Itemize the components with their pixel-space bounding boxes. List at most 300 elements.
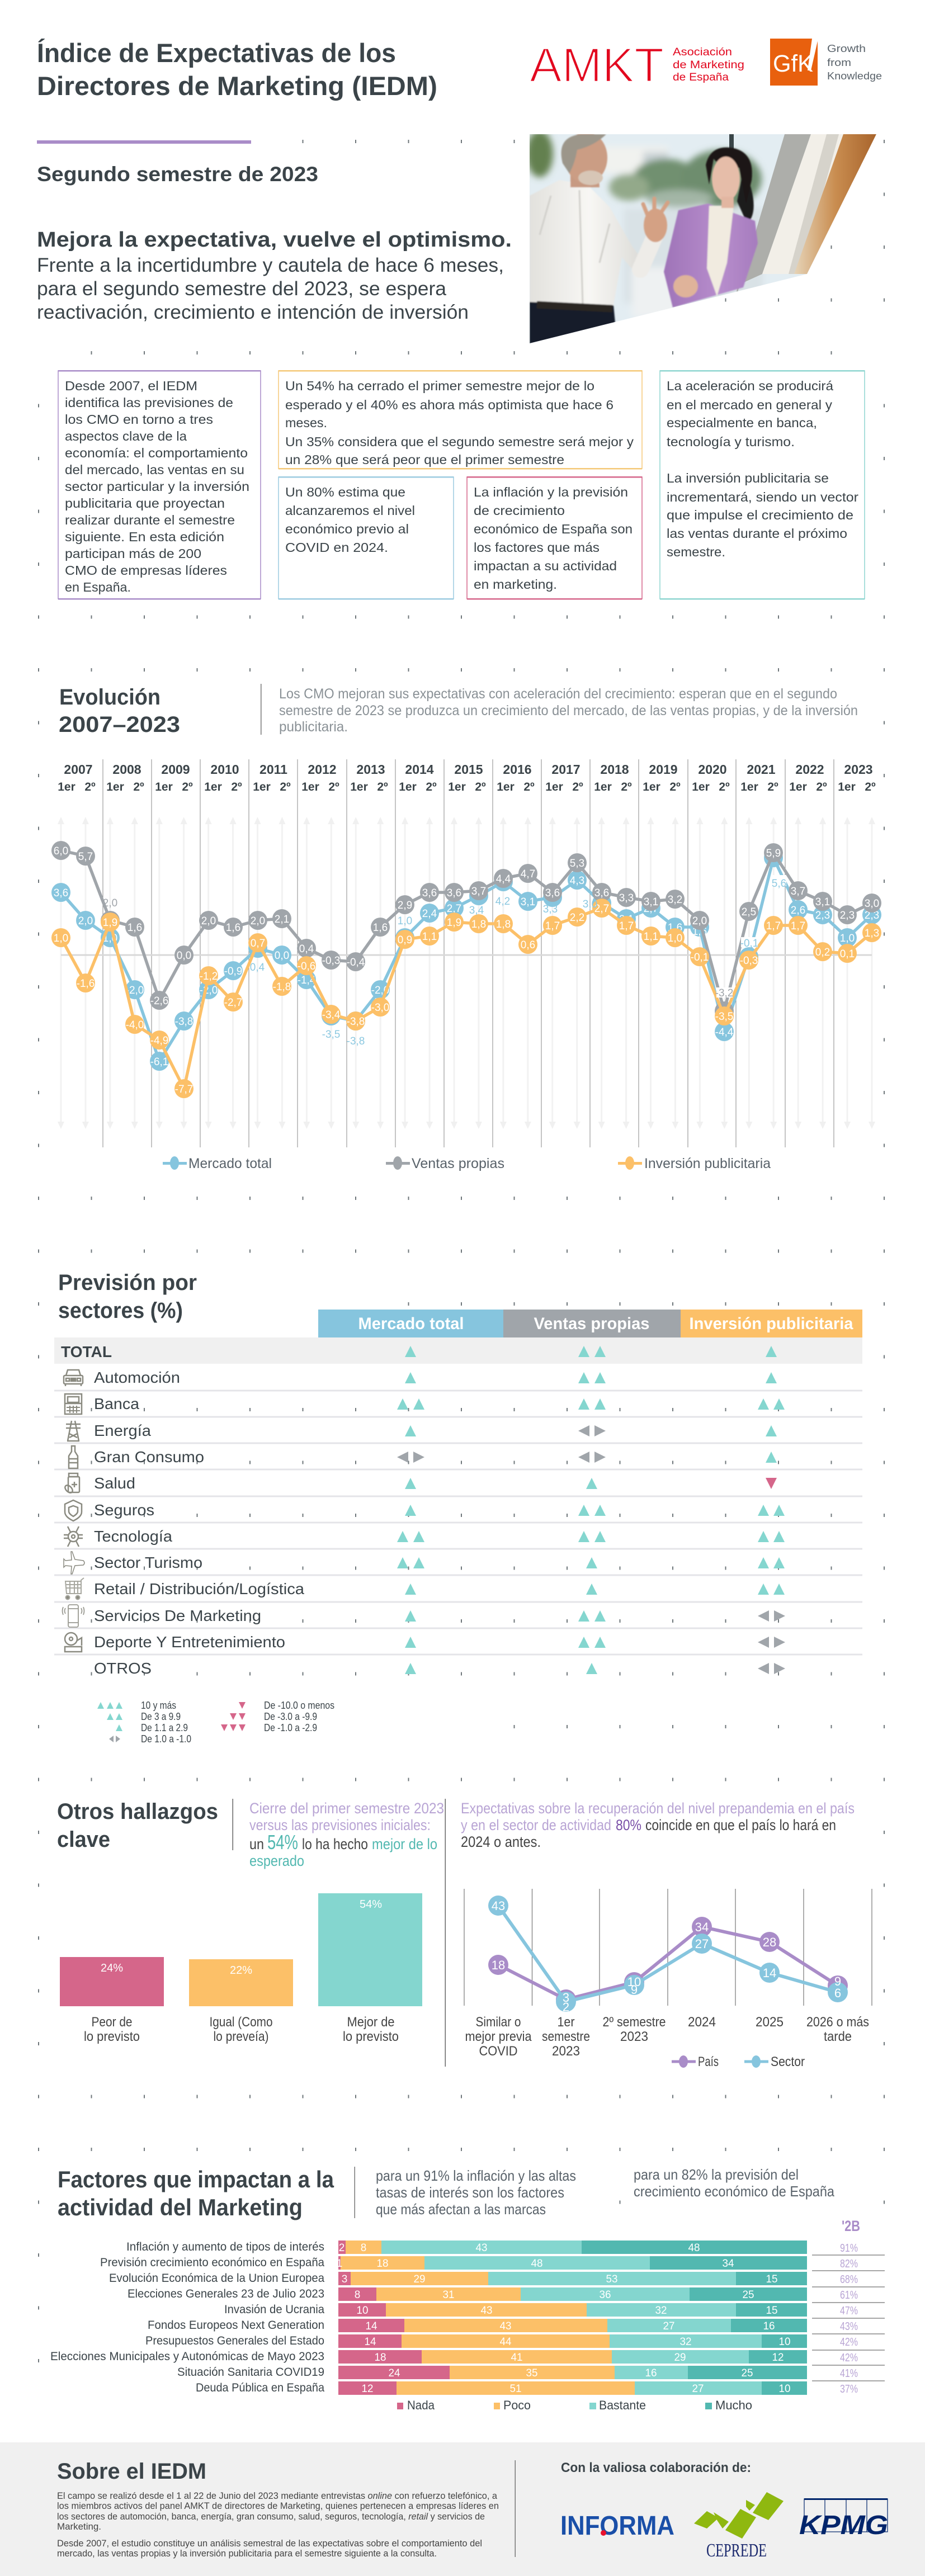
series: Ventas propias: -0,4 <box>347 957 365 968</box>
year and semester header: 2008 <box>112 762 141 777</box>
series: Ventas propias: 4,4 <box>496 873 511 885</box>
logo: AMKT: de Marketing <box>673 59 744 71</box>
panel: first semester results: Un 35% considera que el segundo semestre será mejor y <box>285 434 634 449</box>
bar segments: 31 <box>443 2289 454 2301</box>
year and semester header: 1er <box>740 781 758 793</box>
series: Inversión publicitaria <box>51 899 881 1098</box>
logo: AMKT <box>530 39 744 92</box>
series: País <box>488 1917 848 2010</box>
panel: about IEDM: participan más de 200 <box>65 546 201 561</box>
year and semester header: 2015 <box>454 762 483 777</box>
panel: first semester results: Un 54% ha cerrado el primer semestre mejor de lo <box>285 379 594 393</box>
bar chart: first semester result: lo previsto <box>343 2029 399 2044</box>
category labels: mejor previa <box>465 2029 532 2044</box>
line chart: recovery expectation <box>464 1889 872 2059</box>
title: Índice de Expectativas de los <box>37 38 396 68</box>
legend: forecast symbols: De -3.0 a -9.9 <box>264 1711 317 1722</box>
series: Ventas propias: 0,4 <box>299 943 314 955</box>
bar segments: 12 <box>361 2383 374 2395</box>
row labels: OTROS <box>94 1660 152 1677</box>
year and semester header: 1er <box>301 781 319 793</box>
panel: inflation factors: los factores que más <box>474 540 600 555</box>
table header: Ventas propias <box>534 1315 650 1333</box>
text: first semester close: un <box>249 1836 264 1852</box>
text: evolution intro: publicitaria. <box>279 719 348 735</box>
text: 82% growth: crecimiento económico de España <box>634 2183 834 2200</box>
year and semester header: 1er <box>155 781 173 793</box>
series: Inversión publicitaria: 1,3 <box>865 928 879 939</box>
series: Ventas propias: 3,1 <box>815 896 830 908</box>
series: Mercado total: -1,4 <box>298 975 316 986</box>
series: Ventas propias: 0,0 <box>177 950 191 962</box>
top 2 box percentages: 42% <box>840 2352 858 2364</box>
methodology text: Desde 2007, el estudio constituye un análisis semestral de las expectativas sobre el comportamiento del <box>57 2538 482 2549</box>
logo: GfK: Knowledge <box>827 70 882 82</box>
bar segments: 29 <box>414 2274 425 2285</box>
series: Sector: 27 <box>695 1937 709 1951</box>
icon: electricity tower <box>66 1421 81 1441</box>
top 2 box percentages: 43% <box>840 2320 858 2333</box>
bar segments: 35 <box>526 2367 538 2379</box>
series: Inversión publicitaria: 1,8 <box>471 919 486 930</box>
series: Inversión publicitaria: -7,7 <box>175 1084 193 1095</box>
heading: Sobre el IEDM: Sobre el IEDM <box>57 2459 206 2484</box>
year and semester header: 2º <box>621 781 632 793</box>
row labels: Retail / Distribución/Logística <box>94 1580 304 1597</box>
text: pre-pandemic recovery: Expectativas sobre la recuperación del nivel prepandemia en el país <box>461 1800 855 1817</box>
panel: about IEDM: del mercado, las ventas en su <box>65 462 244 477</box>
year and semester header: 2020 <box>698 762 727 777</box>
panel: acceleration: especialmente en banca, <box>667 415 817 430</box>
text: pre-pandemic recovery <box>461 1800 855 1850</box>
series: Inversión publicitaria: 0,9 <box>398 934 412 946</box>
category labels: COVID <box>479 2044 518 2059</box>
series: País: 34 <box>695 1920 709 1934</box>
bar segments: 16 <box>763 2320 775 2332</box>
bar segments: 10 <box>357 2305 368 2317</box>
logo: INFORMA: INFORMA <box>560 2511 674 2541</box>
series: Mercado total: 2,7 <box>447 903 461 915</box>
series: Ventas propias: 6,0 <box>54 845 68 857</box>
year and semester header: 2º <box>475 781 486 793</box>
logo: AMKT: Asociación <box>673 46 732 58</box>
year and semester header: 1er <box>789 781 807 793</box>
top 2 box percentages: 42% <box>840 2336 858 2348</box>
series: Inversión publicitaria: 1,7 <box>545 920 560 932</box>
bar segments: 10 <box>778 2336 791 2348</box>
panel: pre-COVID level <box>279 476 454 599</box>
icon: plane <box>64 1552 84 1574</box>
bar chart: first semester result: 24% <box>101 1962 123 1974</box>
series: Ventas propias <box>51 841 881 1020</box>
category labels: 2023 <box>552 2044 580 2059</box>
series: Mercado total: 4,3 <box>570 875 584 887</box>
series: Inversión publicitaria: -0,6 <box>298 961 315 972</box>
series: Inversión publicitaria: 0,7 <box>251 938 265 949</box>
series: Ventas propias: 3,6 <box>422 887 437 899</box>
text: 91% inflation: para un 91% la inflación y las altas <box>376 2167 576 2184</box>
legend: forecast symbols: De 3 a 9.9 <box>141 1711 181 1722</box>
legend: evolution chart <box>163 1156 771 1171</box>
series: Inversión publicitaria: 1,7 <box>791 920 805 932</box>
bar segments: 14 <box>365 2336 376 2348</box>
panel: pre-COVID level: Un 80% estima que <box>285 485 405 499</box>
bar segments: 43 <box>475 2242 488 2254</box>
series: Inversión publicitaria: -3,8 <box>347 1016 365 1028</box>
year and semester header: 2º <box>231 781 242 793</box>
year and semester header: 2º <box>523 781 535 793</box>
bar chart: first semester result: lo previsto <box>84 2029 140 2044</box>
panel: about IEDM: identifica las previsiones de <box>65 395 233 410</box>
series: Inversión publicitaria: -4,9 <box>150 1035 168 1047</box>
series: Ventas propias: 3,3 <box>619 892 634 904</box>
category labels <box>465 2015 869 2059</box>
series: Inversión publicitaria: -1,8 <box>273 981 291 993</box>
panel: footer about IEDM <box>0 2442 925 2576</box>
series: Ventas propias: 2,3 <box>840 910 855 921</box>
forecast markers <box>397 1346 785 1674</box>
year and semester header: 2º <box>328 781 339 793</box>
logo: KPMG <box>799 2498 888 2540</box>
outside data labels: 4,2 <box>495 896 510 907</box>
panel: acceleration: La inversión publicitaria se <box>667 471 829 485</box>
year and semester header: 2º <box>84 781 96 793</box>
series: Mercado total <box>51 848 881 1071</box>
category labels: Similar o <box>475 2015 521 2030</box>
series: Mercado total: 2,0 <box>78 915 93 927</box>
text: evolution intro: Los CMO mejoran sus expectativas con aceleración del crecimiento: esperan que en el segundo <box>279 686 837 702</box>
bar segments: 43 <box>481 2305 492 2317</box>
row labels: Sector Turismo <box>94 1554 202 1571</box>
series: Ventas propias: 3,6 <box>594 887 609 899</box>
series: Mercado total: -2,0 <box>126 985 144 996</box>
methodology text: mercado, las ventas propias y la inversión publicitaria para el semestre siguiente a la consulta. <box>57 2548 437 2559</box>
panel: about IEDM: en España. <box>65 580 131 594</box>
series: Ventas propias: 3,2 <box>668 894 682 906</box>
series: Mercado total: -2,0 <box>200 985 218 996</box>
column header: top 2 box: '2B <box>842 2218 860 2234</box>
bar segments: 32 <box>655 2305 667 2317</box>
legend: evolution chart: Ventas propias <box>412 1156 504 1171</box>
heading: Previsión por sectores: sectores (%) <box>58 1298 183 1323</box>
panel: inflation factors: económico de España son <box>474 522 633 536</box>
row labels: Energía <box>94 1422 151 1439</box>
series: Inversión publicitaria: 1,9 <box>447 917 461 929</box>
bar chart: first semester result: 54% <box>360 1898 382 1911</box>
panel: about IEDM: publicitaria que proyectan <box>65 496 225 511</box>
series: Mercado total: 2,1 <box>619 914 634 925</box>
row labels: Fondos Europeos Next Generation <box>148 2319 324 2332</box>
category labels: semestre <box>542 2029 590 2044</box>
text: 91% inflation <box>376 2167 576 2218</box>
bar chart: first semester result: 22% <box>230 1964 252 1977</box>
top 2 box percentages: 61% <box>840 2289 858 2301</box>
text: 82% growth: para un 82% la previsión del <box>634 2166 799 2183</box>
year and semester header: 2016 <box>503 762 532 777</box>
bar segments: 53 <box>606 2274 617 2285</box>
text: 91% inflation: tasas de interés son los factores <box>376 2184 564 2201</box>
series: Mercado total: -4,4 <box>715 1027 734 1038</box>
series: Ventas propias: 4,7 <box>521 868 535 880</box>
bar segments: 27 <box>663 2320 674 2332</box>
year and semester header: 1er <box>399 781 417 793</box>
line chart: evolution 2007-2023 <box>51 759 881 1147</box>
top 2 box percentages: 41% <box>840 2367 858 2380</box>
heading: Evolución: 2007–2023 <box>59 712 180 737</box>
series: Inversión publicitaria: 1,7 <box>766 920 781 932</box>
series: Ventas propias: 2,0 <box>251 915 265 927</box>
year and semester header: 2º <box>182 781 193 793</box>
bar chart: first semester result: Peor de <box>92 2015 132 2030</box>
outside data labels: -3,2 <box>715 987 733 999</box>
series: Ventas propias: 2,9 <box>398 900 412 911</box>
year and semester header: 2º <box>280 781 291 793</box>
year and semester header: 1er <box>497 781 515 793</box>
table header: Mercado total <box>358 1315 464 1333</box>
year and semester header: 1er <box>204 781 222 793</box>
series: Sector <box>488 1896 848 2014</box>
top 2 box percentages: 91% <box>840 2242 858 2254</box>
series: Mercado total: 1,6 <box>668 922 682 934</box>
panel: pre-COVID level: COVID en 2024. <box>285 540 388 555</box>
series: Inversión publicitaria: -3,4 <box>322 1009 341 1021</box>
series: Inversión publicitaria: -3,5 <box>715 1011 733 1023</box>
panel: inflation factors: en marketing. <box>474 577 557 592</box>
row labels: Salud <box>94 1474 135 1492</box>
bar segments: 8 <box>361 2242 366 2254</box>
year and semester header: 2007 <box>64 762 93 777</box>
logo: GfK: from <box>827 57 851 68</box>
series: Inversión publicitaria: 1,9 <box>103 917 117 929</box>
series: Ventas propias: 2,0 <box>692 915 707 927</box>
stacked bar chart: impact factors <box>50 2241 885 2395</box>
panel: about IEDM: los CMO en torno a tres <box>65 412 213 427</box>
series: Ventas propias: 1,6 <box>128 922 142 934</box>
bar segments: 2 <box>339 2242 344 2254</box>
bar segments: 25 <box>742 2367 753 2379</box>
text: 82% growth <box>634 2166 834 2200</box>
category labels: 2024 <box>688 2015 716 2030</box>
legend: evolution chart: Inversión publicitaria <box>644 1156 771 1171</box>
outside data labels: 0,4 <box>250 962 265 973</box>
bar segments: 12 <box>772 2352 784 2364</box>
series: Ventas propias: 2,5 <box>742 906 756 918</box>
series: Mercado total: 2,7 <box>644 903 658 915</box>
heading: Evolución: Evolución <box>59 685 161 710</box>
series: Ventas propias: -2,6 <box>150 995 168 1007</box>
series: Inversión publicitaria: -0,3 <box>740 955 758 967</box>
collaborators heading: Con la valiosa colaboración de: <box>561 2460 751 2475</box>
row labels: Automoción <box>94 1369 180 1386</box>
row labels: Evolución Económica de la Union Europea <box>109 2272 324 2285</box>
legend: evolution chart: Mercado total <box>188 1156 272 1171</box>
bar chart: first semester result: lo preveía) <box>214 2029 268 2044</box>
year and semester header: 2º <box>816 781 827 793</box>
outside data labels: -3,5 <box>322 1029 340 1041</box>
series: Inversión publicitaria: 2,7 <box>594 903 609 915</box>
year and semester header: 1er <box>838 781 856 793</box>
year and semester header: 1er <box>692 781 710 793</box>
series: Inversión publicitaria: 1,0 <box>668 933 682 944</box>
intro text: Frente a la incertidumbre y cautela de hace 6 meses, <box>37 254 504 276</box>
panel: acceleration: semestre. <box>667 545 725 559</box>
methodology text: los miembros activos del panel AMKT de directores de Marketing, quienes pertenecen a empresas líderes en <box>57 2501 499 2511</box>
panel: about IEDM: Desde 2007, el IEDM <box>65 379 197 393</box>
series: Ventas propias: 3,7 <box>471 886 486 897</box>
series: Inversión publicitaria: 1,1 <box>644 931 658 943</box>
bar segments: 16 <box>645 2367 657 2379</box>
panel: about IEDM: realizar durante el semestre <box>65 513 235 527</box>
legend: impact factors: Nada <box>407 2398 435 2412</box>
series: Sector: 43 <box>492 1899 505 1913</box>
photo: two executives talking <box>526 130 876 352</box>
row labels: Invasión de Ucrania <box>224 2303 324 2316</box>
year and semester header: 2º <box>572 781 583 793</box>
intro text <box>37 254 504 323</box>
row labels: Tecnología <box>94 1528 172 1545</box>
category labels: tarde <box>824 2029 852 2044</box>
text: pre-pandemic recovery: coincide en que el país lo hará en <box>645 1817 836 1833</box>
year and semester header: 2014 <box>405 762 434 777</box>
series: Inversión publicitaria: 0,1 <box>840 948 855 960</box>
text: first semester close <box>249 1800 444 1869</box>
category labels: 1er <box>557 2015 575 2030</box>
series: Inversión publicitaria: 1,8 <box>496 919 511 930</box>
top 2 box percentages: 37% <box>840 2383 858 2395</box>
outside data labels: 3,3 <box>543 904 558 915</box>
legend: recovery chart: Sector <box>771 2054 805 2069</box>
outside data labels <box>103 875 786 1047</box>
row labels: Seguros <box>94 1501 154 1519</box>
year and semester header: 2009 <box>161 762 190 777</box>
legend: forecast symbols: De 1.0 a -1.0 <box>141 1733 191 1745</box>
year and semester header: 1er <box>594 781 612 793</box>
year and semester header: 1er <box>545 781 563 793</box>
panel: first semester results <box>279 370 642 470</box>
text: first semester close: mejor de lo <box>372 1836 437 1852</box>
outside data labels: -0,1 <box>740 938 758 949</box>
year and semester header: 1er <box>106 781 124 793</box>
year and semester header: 2018 <box>600 762 629 777</box>
outside data labels: 5,6 <box>772 878 786 890</box>
series: Ventas propias: 5,9 <box>766 848 781 859</box>
text: pre-pandemic recovery: y en el sector de actividad <box>461 1817 611 1833</box>
series: Inversión publicitaria: -1,6 <box>77 978 95 990</box>
series: Ventas propias: 2,0 <box>201 915 216 927</box>
panel: acceleration: que impulse el crecimiento de <box>667 508 853 522</box>
icon: smartphone <box>63 1605 84 1627</box>
bar segments: 43 <box>500 2320 511 2332</box>
series: Mercado total: -0,9 <box>224 966 242 977</box>
heading: Otros hallazgos clave: Otros hallazgos <box>57 1799 218 1824</box>
heading: Factores <box>58 2166 334 2220</box>
year and semester header: 2º <box>865 781 876 793</box>
series: Mercado total: -3,8 <box>175 1016 193 1028</box>
series: Ventas propias: 2,1 <box>275 914 289 925</box>
series: Ventas propias: 1,6 <box>226 922 240 934</box>
row labels: Deporte Y Entretenimiento <box>94 1633 285 1651</box>
methodology text: El campo se realizó desde el 1 al 22 de Junio del 2023 mediante entrevistas online con refuerzo telefónico, a <box>57 2490 498 2501</box>
text: pre-pandemic recovery: 2024 o antes. <box>461 1833 541 1850</box>
panel: about IEDM <box>58 370 261 599</box>
year and semester header: 2021 <box>747 762 776 777</box>
panel: acceleration: La aceleración se producirá <box>667 379 834 393</box>
row labels: Deuda Pública en España <box>196 2381 324 2394</box>
bar segments: 36 <box>600 2289 611 2301</box>
row labels: Previsión crecimiento económico en España <box>100 2256 324 2269</box>
series: Mercado total: 2,3 <box>815 910 830 921</box>
panel: first semester results: meses. <box>285 415 327 430</box>
top 2 box percentages: 47% <box>840 2305 858 2317</box>
outside data labels: 3,4 <box>469 905 484 916</box>
logo: AMKT: de España <box>673 72 729 83</box>
title: Directores de Marketing (IEDM) <box>37 71 437 101</box>
panel: pre-COVID level: alcanzaremos el nivel <box>285 503 415 518</box>
bar segments: 10 <box>778 2383 791 2395</box>
logo: GfK: GfK <box>773 50 813 77</box>
bar segments: 41 <box>511 2352 522 2364</box>
year and semester header: 1er <box>58 781 75 793</box>
panel: pre-COVID level: económico previo al <box>285 522 409 536</box>
logo: GfK: Growth <box>827 43 866 54</box>
outside data labels: 1,0 <box>398 915 412 927</box>
row labels: Gran Consumo <box>94 1448 204 1466</box>
category labels: 2026 o más <box>806 2015 869 2030</box>
category labels: 2023 <box>620 2029 648 2044</box>
year and semester header: 2º <box>767 781 778 793</box>
legend: impact factors: Mucho <box>715 2398 752 2412</box>
year and semester header: 2010 <box>210 762 239 777</box>
icon: car <box>64 1370 83 1386</box>
heading: Factores: actividad del Marketing <box>58 2194 303 2220</box>
bar segments: 8 <box>355 2289 360 2301</box>
divider <box>261 684 262 735</box>
outside data labels: 3,0 <box>583 899 597 910</box>
legend: forecast symbols: De -1.0 a -2.9 <box>264 1722 317 1733</box>
category labels: 2025 <box>756 2015 784 2030</box>
series: Ventas propias: 3,6 <box>447 887 461 899</box>
purple accent bar <box>37 140 251 144</box>
year and semester header: 1er <box>448 781 466 793</box>
series: Inversión publicitaria: 0,2 <box>815 947 830 958</box>
series: Mercado total: 2,6 <box>791 905 805 916</box>
logo: AMKT: AMKT <box>530 39 664 92</box>
series: Mercado total: 3,1 <box>521 896 535 908</box>
text: first semester close: esperado <box>249 1852 304 1869</box>
bar segments: 25 <box>743 2289 754 2301</box>
headline: Mejora la expectativa, vuelve el optimismo. <box>37 228 512 252</box>
legend: recovery chart: País <box>698 2054 719 2069</box>
series: Inversión publicitaria: 2,2 <box>570 912 584 924</box>
panel: about IEDM: siguiente. En esta edición <box>65 530 224 544</box>
year and semester header: 2º <box>377 781 388 793</box>
icon: ATM <box>65 1394 82 1414</box>
series: Mercado total: 1,0 <box>103 933 117 944</box>
row labels <box>61 1343 304 1677</box>
panel: about IEDM: aspectos clave de la <box>65 429 187 443</box>
methodology text: los sectores de automoción, banca, energía, gran consumo, salud, seguros, tecnología, retail y servicios de <box>57 2511 485 2522</box>
bar segments <box>337 2241 807 2395</box>
series: Ventas propias: 1,6 <box>373 922 388 934</box>
series: Mercado total: 0,0 <box>275 950 289 962</box>
series: Sector: 9 <box>834 1974 841 1988</box>
series: Inversión publicitaria: -4,0 <box>126 1019 144 1031</box>
row labels: Elecciones Generales 23 de Julio 2023 <box>128 2287 324 2300</box>
series: Mercado total: 1,6 <box>692 926 707 938</box>
series: Inversión publicitaria: -3,0 <box>371 1002 389 1014</box>
panel: acceleration: las ventas durante el próximo <box>667 526 847 541</box>
bar segments: 51 <box>510 2383 521 2395</box>
